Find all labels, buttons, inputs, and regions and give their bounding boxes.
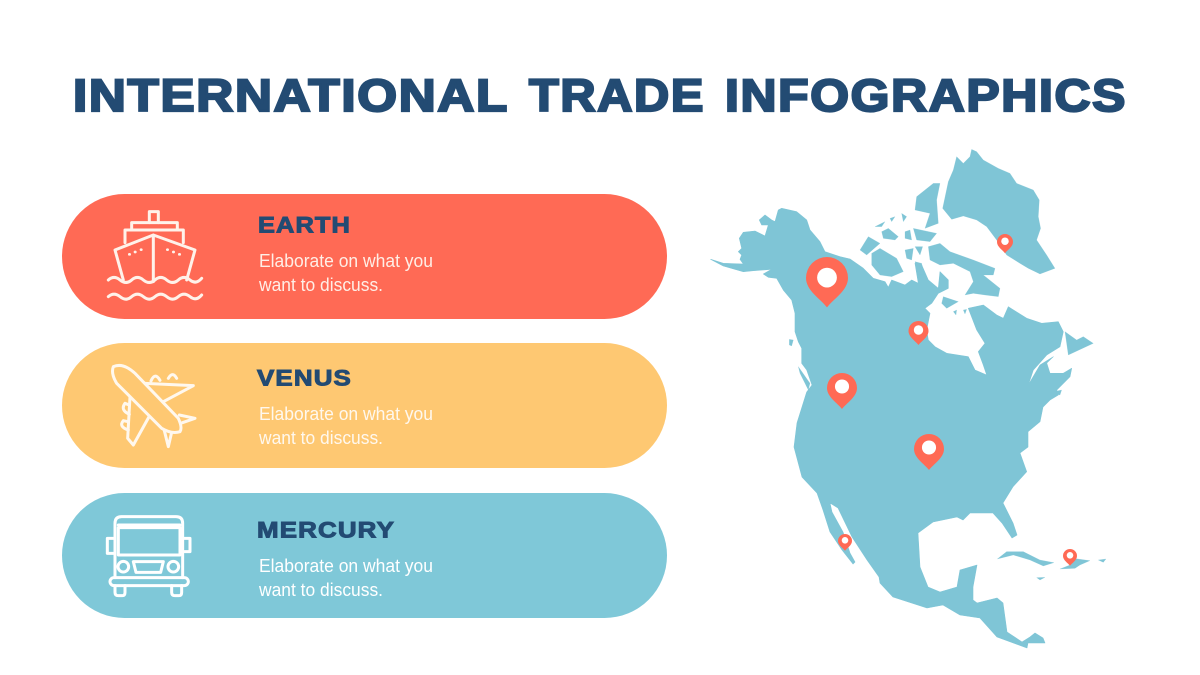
icon: airplane: [113, 365, 195, 447]
panel: mercury: [62, 493, 667, 618]
pin: mexico: [838, 534, 852, 551]
text: venus body: [258, 404, 433, 448]
islands: caribbean: [997, 390, 1106, 580]
icon: bus: [107, 517, 190, 596]
text: venus body: want to discuss.: [258, 428, 383, 448]
text: earth body: Elaborate on what you: [259, 251, 433, 271]
islands: canadian arctic: [860, 213, 1093, 355]
pin: caribbean: [1063, 549, 1077, 566]
icon: ship: [108, 212, 202, 299]
islands: greenland and ellesmere: [789, 149, 1055, 390]
pin: hudson: [908, 321, 928, 345]
pin: central: [914, 434, 944, 470]
map: north america: [711, 149, 1106, 648]
text: venus body: Elaborate on what you: [259, 404, 433, 424]
heading: mercury: MERCURY: [257, 518, 395, 542]
pin: west coast: [827, 373, 857, 409]
pin: alaska: [806, 257, 848, 307]
text: mercury body: want to discuss.: [258, 580, 383, 600]
title: INFOGRAPHICS: [725, 70, 1127, 121]
title: INTERNATIONAL: [73, 70, 509, 121]
text: mercury body: Elaborate on what you: [259, 556, 433, 576]
title: TRADE: [529, 70, 705, 121]
heading: venus: VENUS: [257, 366, 352, 390]
heading: earth: EARTH: [258, 212, 351, 238]
text: earth body: [258, 251, 433, 295]
title: [73, 70, 1127, 121]
panel: earth: [62, 194, 667, 319]
text: mercury body: [258, 556, 433, 600]
panel: venus: [62, 343, 667, 468]
text: earth body: want to discuss.: [258, 275, 383, 295]
pin: greenland: [997, 234, 1013, 253]
